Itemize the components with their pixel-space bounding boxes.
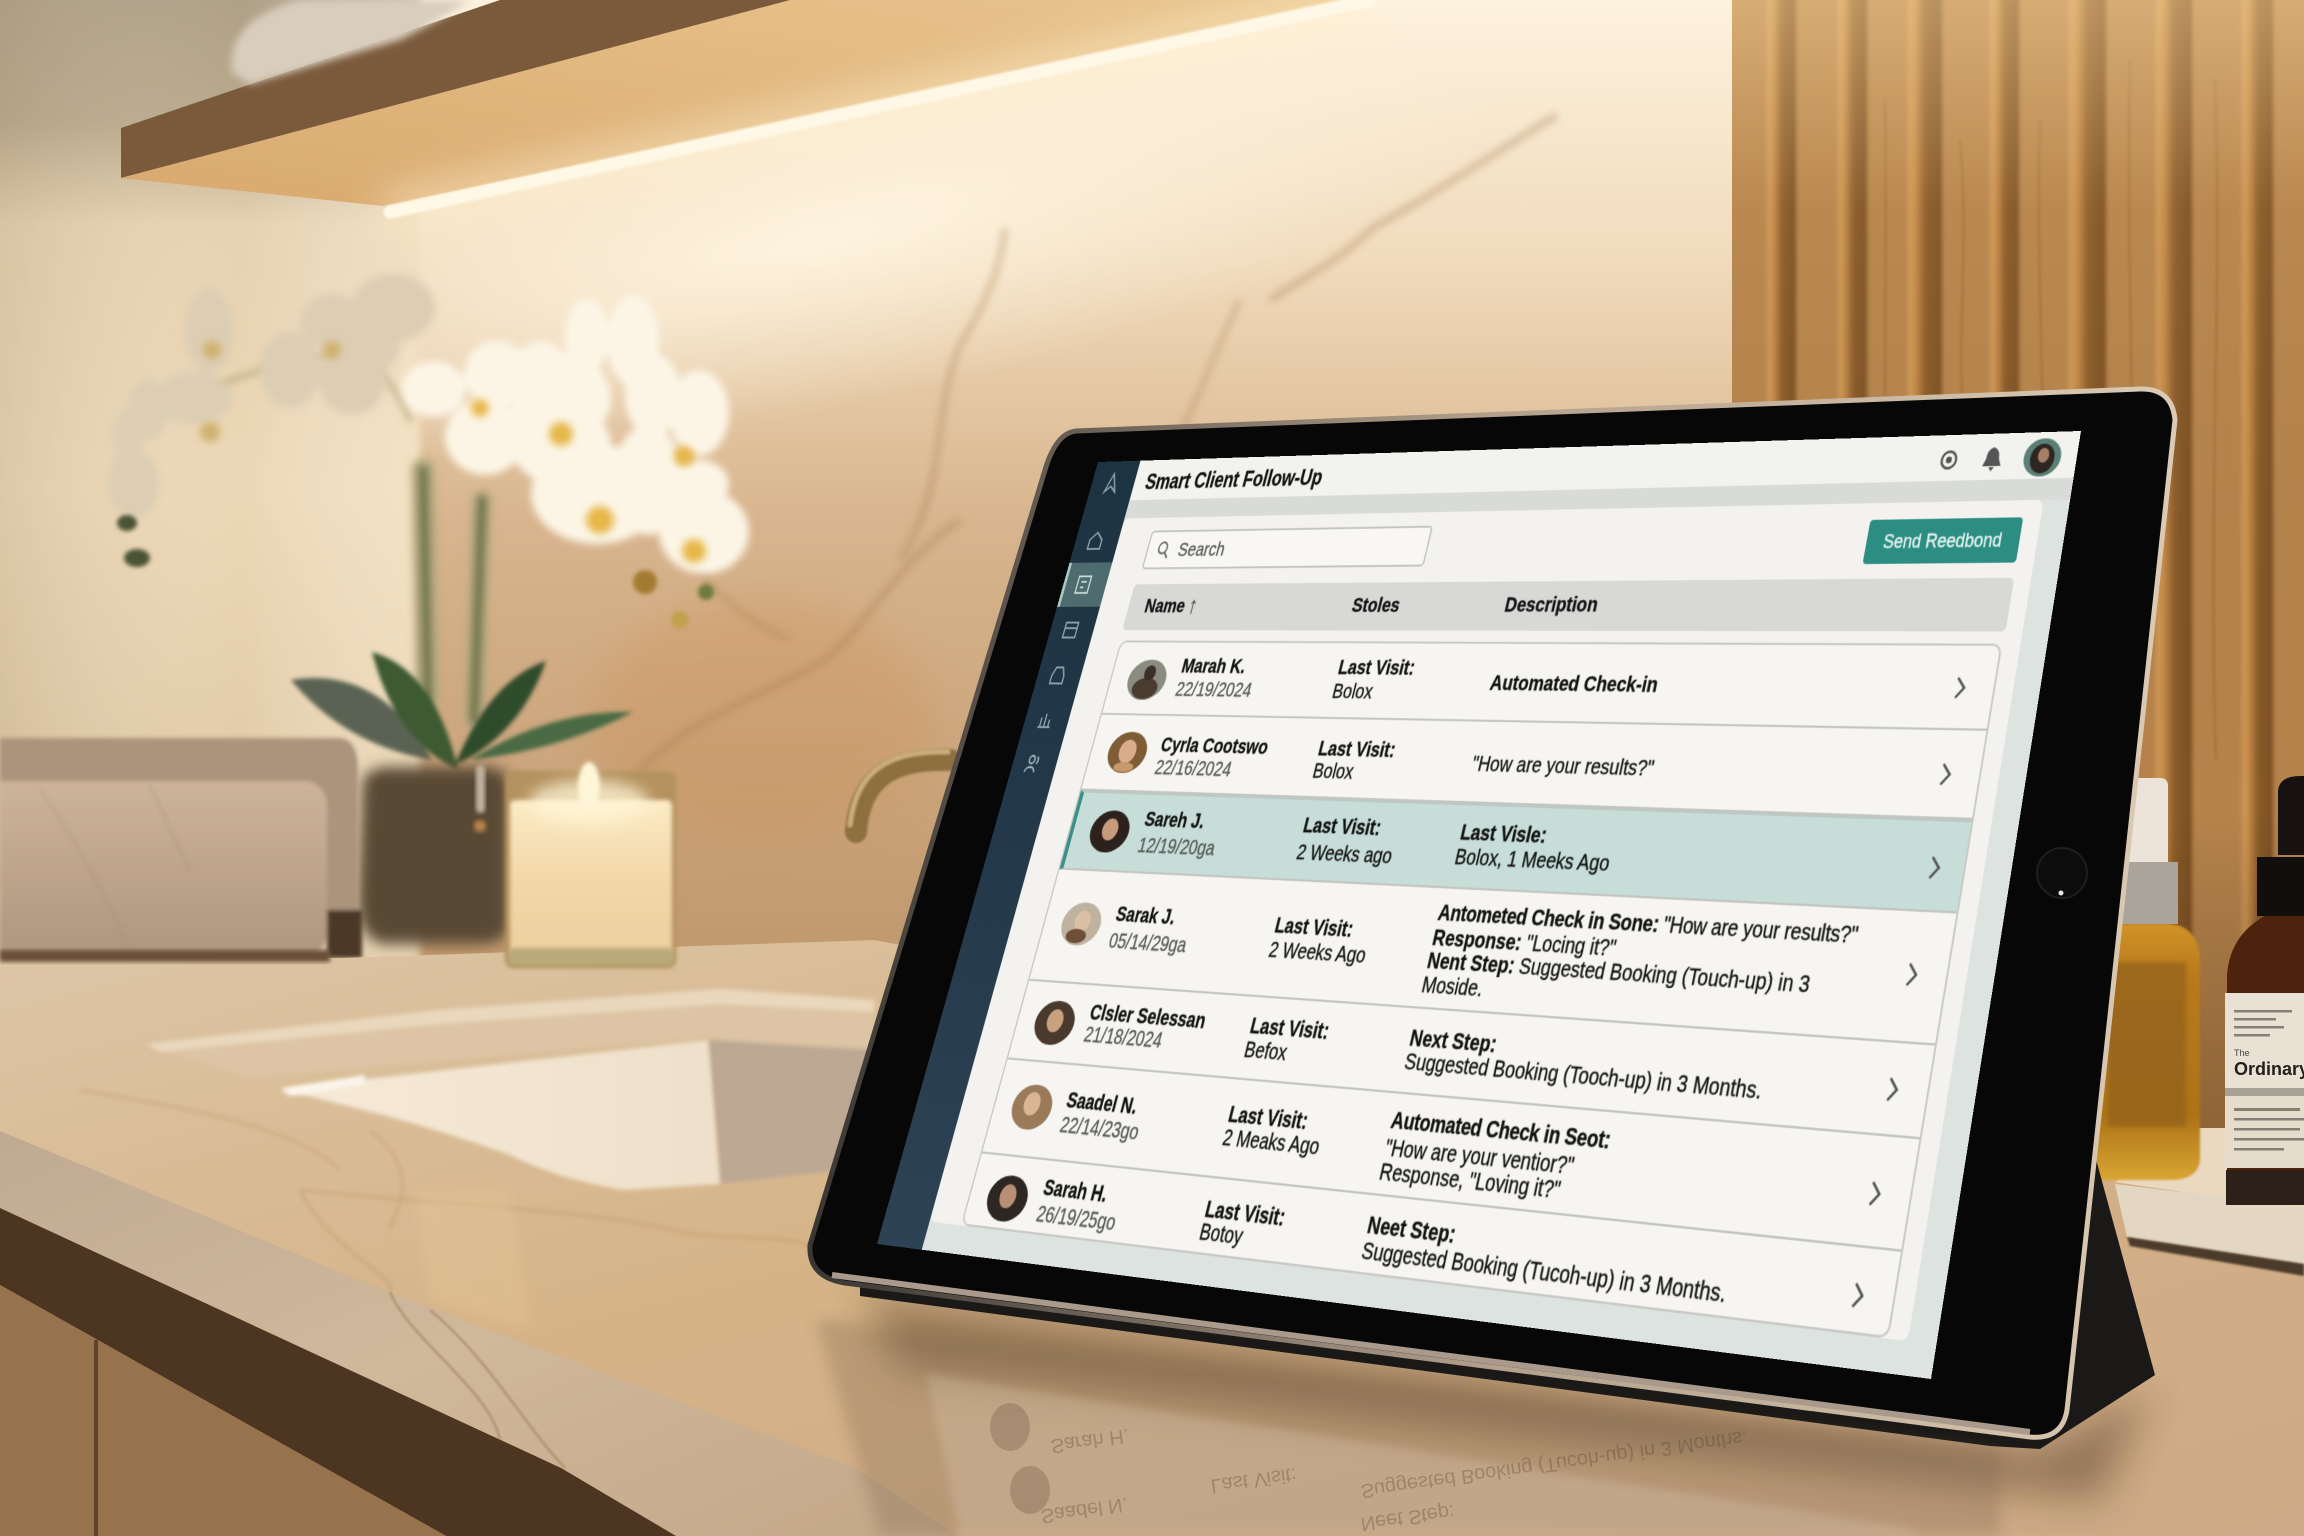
date: 22/19/2024 [1173,678,1254,702]
name: Sareh J. [1142,808,1207,833]
name: Sarah H. [1041,1175,1110,1207]
avatar [1107,732,1148,774]
avatar [1029,1000,1080,1046]
screen reflection on counter: Sarah H. [1049,1424,1131,1457]
name: Saadel N. [1064,1088,1140,1119]
icon: bell [1982,447,2001,472]
check-in line: Antometed Check in Sone: "How are your results?" [1436,900,1860,949]
column: name: Name [1142,595,1188,617]
leaves [291,652,633,770]
description: "How are your results?" [1470,752,1656,781]
chevron [1928,856,1941,880]
home button [2037,848,2087,898]
response: Response, "Loving it?" [1377,1159,1563,1204]
header bar [1130,431,2081,500]
tablet shadow on counter [860,1295,2150,1500]
header shadow band [1124,478,2074,518]
date: 22/14/23go [1057,1112,1142,1145]
treatment: Befox [1242,1037,1290,1066]
chevron [1867,1179,1884,1208]
sidebar [877,461,1141,1250]
orchid plant [107,274,749,770]
icon: home [1086,531,1103,550]
description heading: Automated Check in Seot: [1389,1107,1613,1154]
next step line: Nent Step: Suggested Booking (Touch-up) in 3 [1425,948,1812,998]
icon: chart [1037,714,1050,728]
left buds and leaves [117,515,150,567]
icon: search [1158,541,1169,560]
next step: Suggested Booking (Tucoh-up) in 3 Months. [1359,1237,1729,1308]
avatar [1060,902,1102,946]
last visit: Last Visit: [1301,813,1384,840]
row 2 [1081,715,1986,820]
row 5 [1008,981,1935,1139]
column: description: Description [1502,593,1600,617]
title: Smart Client Follow-Up [1143,465,1325,494]
marble wall [100,0,1740,1150]
description: Bolox, 1 Meeks Ago [1452,845,1612,876]
name: Sarak J. [1113,902,1178,929]
response line: Response: "Locing it?" [1430,925,1618,961]
profile avatar [2022,438,2062,477]
LED light strip [385,0,1370,214]
next step continuation: Moside. [1419,972,1486,1002]
bright flowers [402,295,749,574]
dim blurred flowers [107,274,435,518]
folio stand [860,1130,2155,1449]
search box [1142,526,1433,569]
counter gloss reflection [415,1190,530,1330]
icon: logo [1102,472,1116,495]
row 4 [1029,870,1956,1046]
next step heading: Next Step: [1407,1025,1499,1058]
icon: calendar [1062,622,1080,639]
last visit: Last Visit: [1226,1102,1311,1135]
row 7 [962,1153,1901,1339]
description: Automated Check-in [1488,671,1660,697]
time since visit: 2 Meaks Ago [1220,1125,1322,1160]
name: Cyrla Cootswo [1158,734,1271,759]
stems [215,356,482,720]
name: Marah K. [1179,655,1248,678]
avatar [1126,659,1167,700]
shelf with towels [121,0,1370,206]
client list card [961,640,2003,1339]
last visit: Last Visit: [1336,656,1417,680]
pump bottle [2090,778,2200,1180]
wood slat wall [1732,0,2304,1170]
icon: clients [1023,754,1040,773]
treatment: Bolox [1330,680,1375,703]
icon: sort arrow: ↑ [1185,592,1201,619]
description heading: Last Visle: [1458,820,1549,848]
send button: Send Reedbond [1881,529,2004,552]
chevron [1954,676,1966,700]
rolled towels [0,738,362,958]
tray [2115,1128,2304,1276]
row 3 highlighted [1059,790,1972,914]
chevron [1939,762,1952,786]
active nav highlight [1057,562,1112,607]
chevron [1850,1281,1867,1310]
time since visit: 2 Weeks Ago [1266,937,1368,968]
treatment: Botoy [1197,1219,1246,1250]
towel shadow on counter [0,950,330,962]
sink [147,989,874,1190]
left cream wall [0,0,420,1000]
icon: sync [1940,450,1958,470]
flower centers [200,341,706,563]
screen reflection on counter: Neet Step: [1359,1500,1456,1535]
row 6 [982,1059,1919,1252]
buds [633,570,714,629]
next step: Suggested Booking (Tooch-up) in 3 Months. [1402,1049,1764,1105]
glass vase [358,765,510,944]
last visit: Last Visit: [1248,1013,1332,1044]
last visit: Last Visit: [1202,1196,1288,1231]
table header [1122,578,2014,631]
content panel [930,500,2044,1341]
icon: inbox [1048,666,1065,685]
last visit: Last Visit: [1272,913,1356,942]
date: 22/16/2024 [1152,756,1234,781]
row 1 [1102,640,2001,731]
tablet body [810,389,2175,1437]
treatment: Bolox [1310,759,1356,784]
chevron [1885,1076,1901,1104]
chevron [1905,962,1918,987]
date: 05/14/29ga [1106,929,1189,958]
counter front edge [0,1131,960,1536]
date: 12/19/20ga [1135,834,1218,860]
candle [505,762,676,968]
gold faucet [850,752,950,832]
counter marble veins [80,1090,810,1290]
bottle label text: The [2234,1048,2250,1058]
avatar [1007,1083,1057,1131]
screen reflection on counter: Saadel N. [1039,1493,1129,1527]
send button [1862,517,2023,564]
dropper bottle [2225,776,2304,1205]
screen reflection on counter: Last Visit: [1209,1463,1298,1497]
avatar [982,1174,1033,1224]
avatar [1089,810,1130,853]
next step heading: Neet Step: [1365,1212,1458,1249]
last visit: Last Visit: [1316,737,1398,762]
column: status: Stoles [1350,594,1403,617]
counter top [0,940,2304,1536]
date: 21/18/2024 [1081,1022,1165,1053]
tablet screen: Smart Client Follow-Up app [877,431,2081,1379]
screen reflection on counter [816,1320,2000,1536]
screen reflection on counter: Suggested Booking (Tucoh-up) in 3 Months. [1359,1426,1749,1502]
icon: follow-ups [1074,575,1093,594]
name: Clsler Selessan [1087,1000,1208,1033]
date: 26/19/25go [1034,1201,1119,1236]
search placeholder: Search [1175,539,1228,561]
time since visit: 2 Weeks ago [1294,840,1395,869]
question: "How are your ventior?" [1382,1135,1576,1180]
